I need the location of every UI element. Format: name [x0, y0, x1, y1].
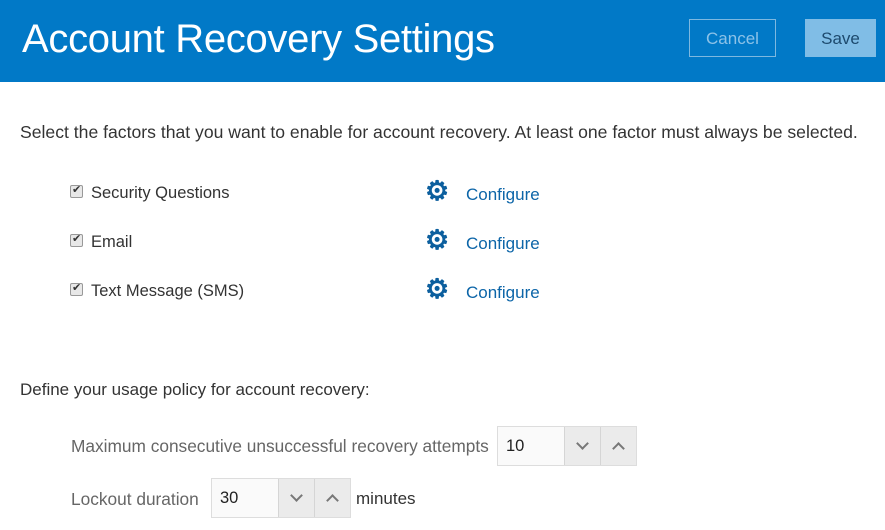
intro text: Select the factors that you want to enable for account recovery. At least one factor must always be selected.: [20, 122, 858, 142]
factor: security questions: Security Questions: [91, 184, 229, 202]
factor: sms: Text Message (SMS): [91, 282, 244, 300]
spinner: [497, 426, 637, 466]
factor: email: Configure: [466, 234, 540, 253]
max attempts row: Maximum consecutive unsuccessful recovery attempts: [71, 436, 489, 456]
factor: email: [70, 225, 540, 255]
cancel button: [689, 19, 776, 57]
lockout row: minutes: [356, 489, 416, 508]
save button: Save: [821, 29, 860, 48]
spinner: [211, 478, 351, 518]
title: Account Recovery Settings: [22, 17, 495, 61]
spinner: 10: [506, 437, 524, 455]
lockout row: [71, 478, 416, 518]
cancel button: Cancel: [706, 29, 759, 48]
icon: gear: ⚙: [425, 225, 449, 255]
icon: gear: ⚙: [425, 176, 449, 206]
icon: gear: ⚙: [425, 274, 449, 304]
header bar: [0, 0, 885, 82]
factor: email: Email: [91, 233, 132, 251]
lockout row: Lockout duration: [71, 489, 199, 509]
save button: [805, 19, 876, 57]
max attempts row: [71, 426, 637, 466]
policy heading: Define your usage policy for account recovery:: [20, 380, 370, 399]
spinner: 30: [220, 489, 238, 507]
factor: sms: [70, 274, 540, 304]
factor: security questions: Configure: [466, 185, 540, 204]
factor: sms: Configure: [466, 283, 540, 302]
factor: security questions: [70, 176, 540, 206]
